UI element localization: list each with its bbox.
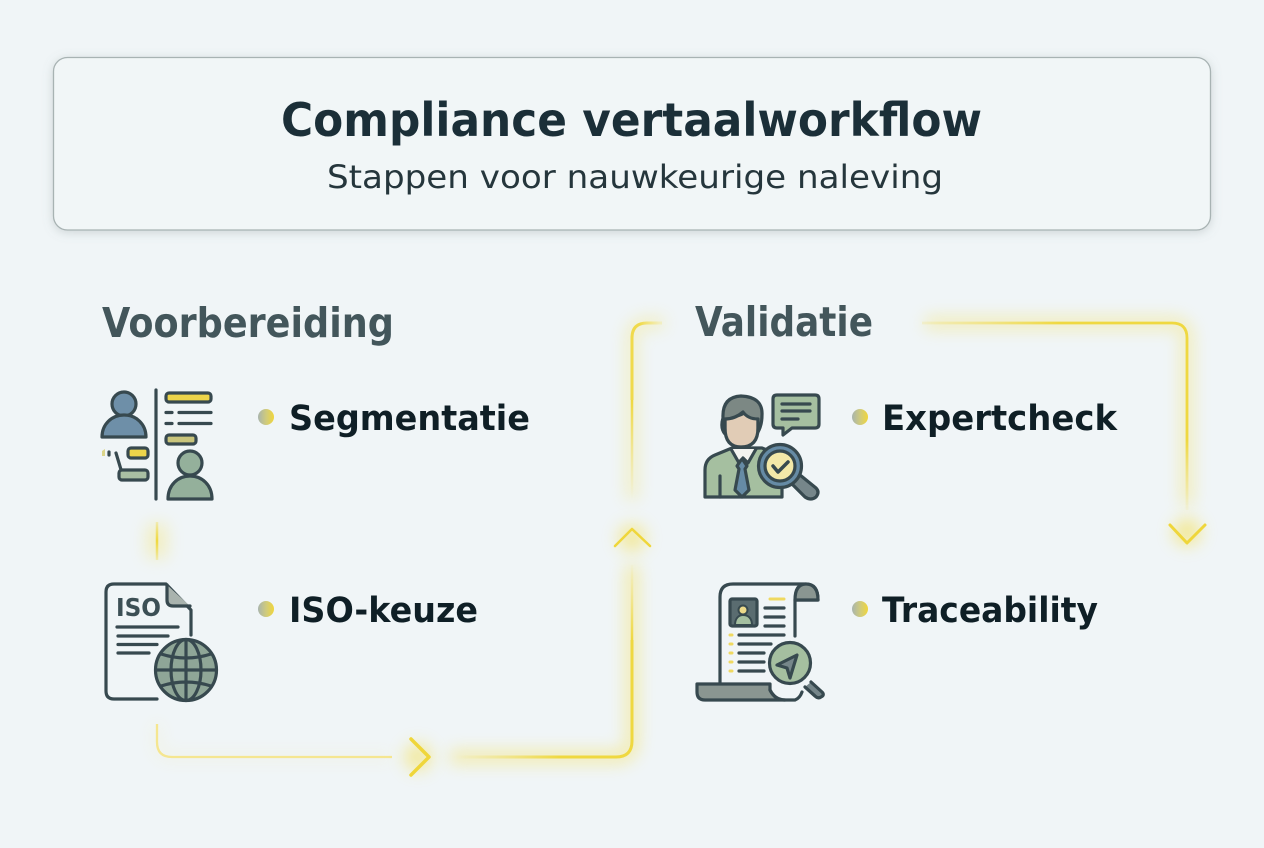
icon: ISO document with globe: ISO bbox=[116, 593, 161, 622]
icon: traceability report bbox=[697, 584, 823, 700]
icon: segmentation bbox=[102, 390, 212, 499]
heading: Validatie: Validatie bbox=[695, 298, 873, 346]
label: Segmentatie: Segmentatie bbox=[289, 399, 530, 439]
bullet: Expertcheck bbox=[852, 409, 868, 425]
label: Expertcheck: Expertcheck bbox=[882, 399, 1118, 439]
label: Traceability: Traceability bbox=[882, 591, 1098, 631]
icon: expert check bbox=[705, 395, 819, 499]
arrow: ISO-keuze to Validatie bbox=[157, 323, 664, 775]
label: ISO-keuze: ISO-keuze bbox=[289, 591, 478, 631]
bullet: ISO-keuze bbox=[258, 601, 274, 617]
subtitle: Stappen voor nauwkeurige naleving bbox=[327, 158, 943, 196]
title panel bbox=[54, 58, 1210, 230]
arrow: Validatie to end bbox=[922, 323, 1205, 546]
bullet: Segmentatie bbox=[258, 409, 274, 425]
heading: Voorbereiding: Voorbereiding bbox=[102, 299, 394, 347]
bullet: Traceability bbox=[852, 601, 868, 617]
icon: ISO document with globe bbox=[106, 584, 216, 700]
title: Compliance vertaalworkflow bbox=[281, 93, 982, 147]
arrow: Segmentatie to ISO-keuze bbox=[147, 522, 167, 560]
